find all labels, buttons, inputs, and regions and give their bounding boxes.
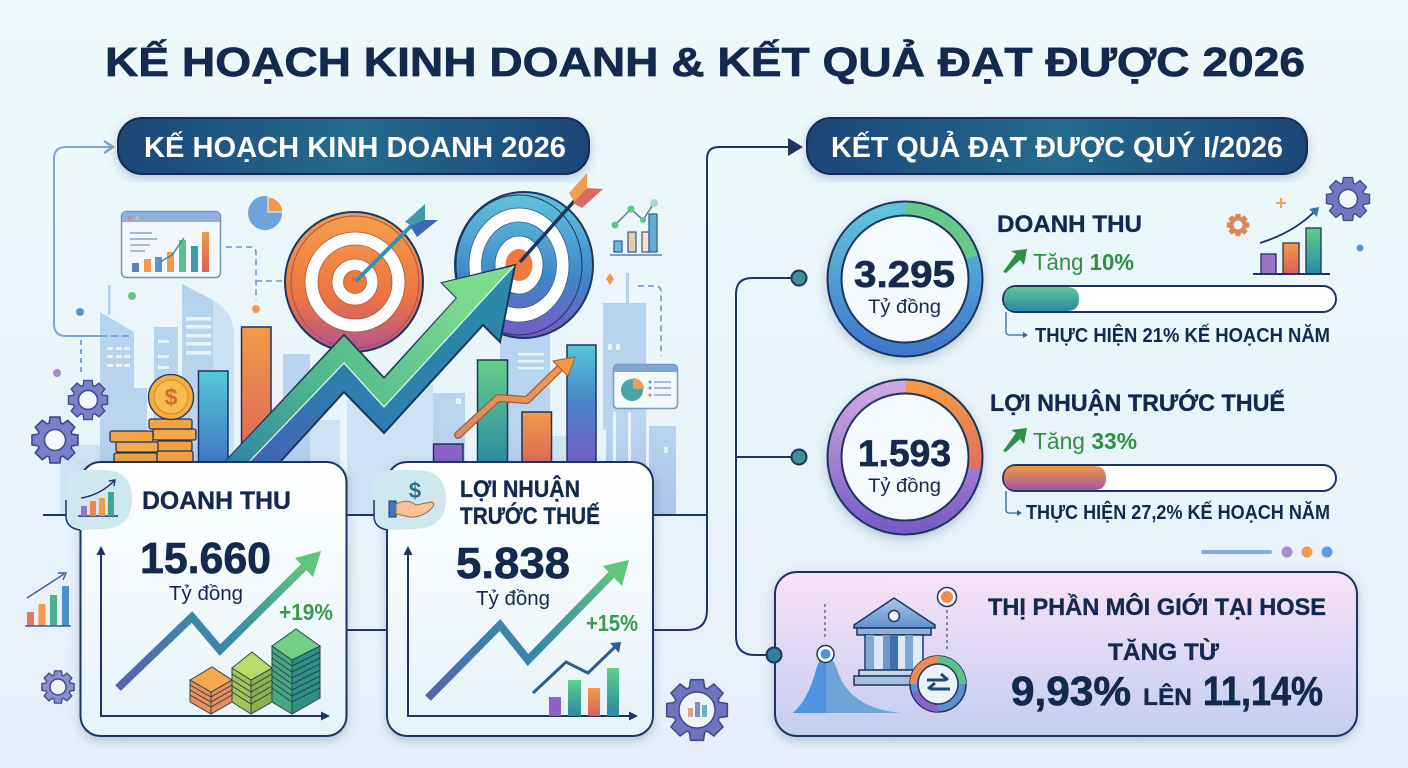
result 2: progress bar — [1003, 465, 1336, 491]
result 1: plan note: THỰC HIỆN 21% KẾ HOẠCH NĂM — [1035, 323, 1330, 347]
axes revenue — [101, 552, 324, 716]
result 1: revenue ring: 3.295 — [854, 254, 955, 295]
orange mini arrow — [458, 357, 575, 435]
heading profit — [460, 475, 600, 530]
result 1: chart icon — [1253, 207, 1330, 274]
node on panel — [766, 648, 782, 662]
share values: LÊN — [1143, 683, 1192, 711]
icon: small line chart top right — [610, 199, 662, 255]
decorative line and dots — [1201, 546, 1332, 558]
mini chart profit — [533, 642, 621, 716]
icon: orange pin — [938, 588, 956, 650]
result 1: heading: DOANH THU — [997, 211, 1142, 238]
share values: 11,14% — [1203, 668, 1323, 714]
card body — [80, 462, 346, 736]
icon: money stacks — [190, 629, 320, 714]
tab icon profit — [374, 470, 446, 530]
card body profit — [387, 462, 653, 736]
tab icon profit: $ — [409, 478, 421, 503]
pill: results heading: KẾT QUẢ ĐẠT ĐƯỢC QUÝ I/2026 — [831, 130, 1283, 164]
result 2: growth text: Tăng 33% — [1033, 428, 1137, 454]
result 2: profit ring: Tỷ đồng — [868, 476, 941, 497]
target: blue — [455, 192, 593, 338]
rising line profit — [428, 568, 618, 698]
title: KẾ HOẠCH KINH DOANH & KẾT QUẢ ĐẠT ĐƯỢC 2026 — [105, 39, 1305, 85]
icon: gear chart bottom — [667, 680, 727, 740]
left connector with nodes — [736, 270, 806, 655]
result 2: growth arrow — [1003, 428, 1027, 452]
result 1: growth text: Tăng 10% — [1033, 249, 1134, 275]
result 1: plan note — [1006, 312, 1330, 347]
icon: side mini chart — [25, 573, 71, 626]
share values: 9,93% — [1011, 668, 1131, 714]
heading profit: LỢI NHUẬN — [460, 475, 580, 503]
result 1: revenue ring: Tỷ đồng — [868, 297, 941, 318]
result 2: heading: LỢI NHUẬN TRƯỚC THUẾ — [990, 389, 1285, 417]
result 1: growth arrow — [1003, 249, 1027, 273]
panel: annual revenue — [66, 462, 346, 736]
coin stack: $ — [165, 384, 178, 410]
gears left — [32, 380, 108, 463]
icon: pie chart — [248, 196, 283, 230]
unit revenue: Tỷ đồng — [169, 583, 243, 605]
city skyline backdrop — [60, 273, 676, 515]
growth profit: +15% — [586, 610, 638, 636]
axes profit — [408, 552, 632, 716]
big rising arrow — [225, 265, 515, 462]
dashed links — [226, 247, 661, 356]
arrow in blue target — [520, 173, 603, 262]
arrowhead to results heading — [788, 138, 803, 156]
result 1: gears and sparks — [1227, 177, 1370, 252]
result 1: revenue ring — [828, 202, 982, 356]
arrow in orange target — [356, 204, 438, 281]
icon: bank building — [854, 598, 935, 685]
pill: plan heading — [118, 118, 589, 174]
unit profit: Tỷ đồng — [476, 588, 550, 610]
result 2: plan note: THỰC HIỆN 27,2% KẾ HOẠCH NĂM — [1026, 500, 1330, 524]
share subheading: TĂNG TỪ — [1108, 638, 1219, 666]
share heading: THỊ PHẦN MÔI GIỚI TẠI HOSE — [988, 593, 1326, 621]
pill: results heading — [807, 118, 1307, 174]
icon: gear lower left — [42, 671, 74, 703]
panel: market share — [766, 572, 1357, 736]
icon: exchange ring — [910, 656, 966, 712]
rising line revenue — [118, 563, 308, 688]
value profit: 5.838 — [456, 539, 570, 588]
growth revenue: +19% — [279, 599, 333, 625]
market share box — [775, 572, 1357, 736]
icon: window pie right — [614, 364, 678, 408]
heading revenue: DOANH THU — [142, 487, 291, 515]
heading profit: TRƯỚC THUẾ — [460, 502, 600, 530]
pill: plan heading: KẾ HOẠCH KINH DOANH 2026 — [144, 130, 566, 164]
panel: annual profit — [374, 462, 653, 736]
horizon and connecting lines — [43, 147, 790, 630]
target: orange — [285, 212, 423, 352]
icon: bell curve — [793, 604, 901, 713]
decorative dots — [53, 273, 614, 377]
gear holes — [44, 390, 98, 450]
icon: browser window chart — [122, 212, 220, 278]
connector: arrow to plan heading — [54, 141, 130, 372]
tab icon revenue — [66, 470, 132, 530]
coin stack — [110, 374, 196, 462]
share values — [1011, 668, 1323, 714]
result 2: profit ring: 1.593 — [858, 433, 951, 474]
value revenue: 15.660 — [140, 534, 271, 583]
result 2: profit ring — [828, 380, 982, 534]
result 2: plan note — [1006, 491, 1330, 524]
result 1: progress bar — [1003, 286, 1336, 312]
bars — [198, 327, 596, 471]
